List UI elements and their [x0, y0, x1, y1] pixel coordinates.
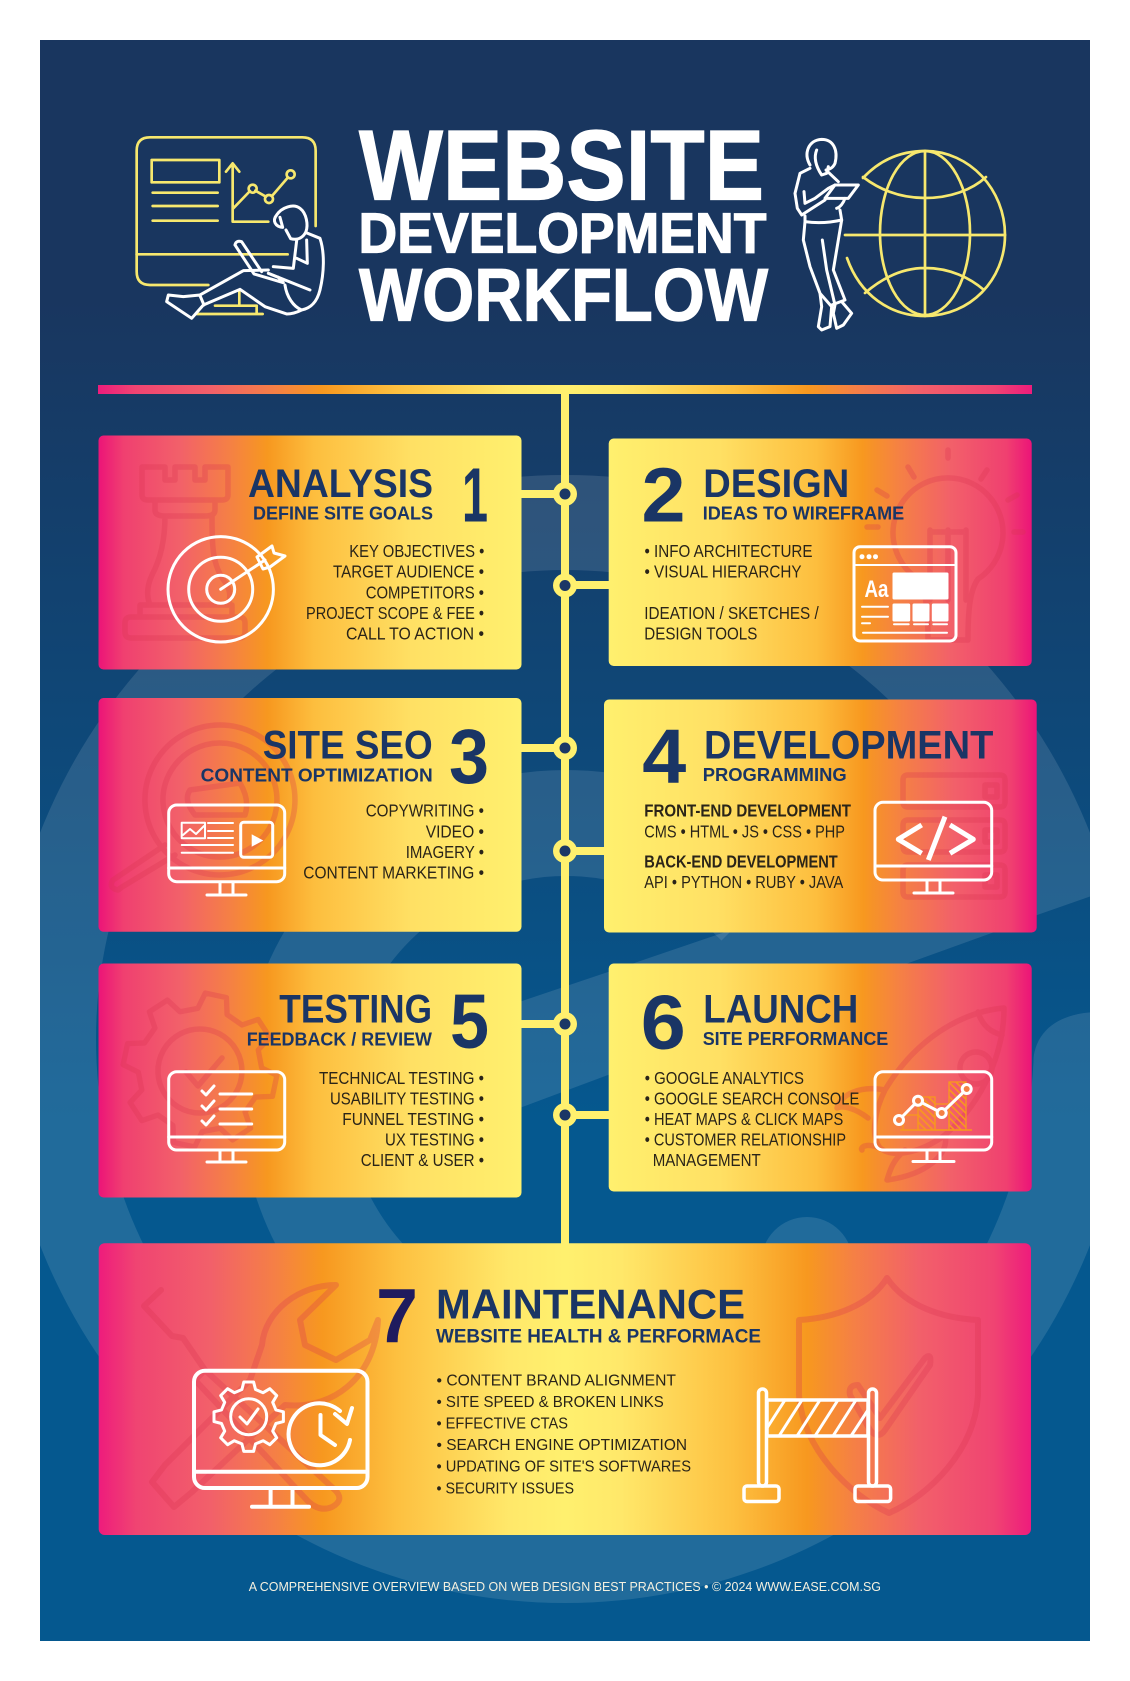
list: CMS • HTML • JS • CSS • PHP — [644, 821, 845, 841]
panel: 3 site seo — [98, 698, 522, 932]
list: • UPDATING OF SITE'S SOFTWARES — [436, 1458, 691, 1475]
step number: 5 — [450, 979, 489, 1065]
icon: ghost light bulb — [867, 450, 1023, 640]
list: • CONTENT BRAND ALIGNMENT — [436, 1372, 676, 1389]
icon: monitor with bar and line chart — [875, 1072, 992, 1162]
icon: ghost chess rook — [125, 467, 245, 638]
panel: 4 development: PROGRAMMING — [703, 764, 847, 785]
list: COPYWRITING • — [366, 801, 484, 821]
icon: target with arrow — [168, 537, 285, 642]
list: TARGET AUDIENCE • — [333, 562, 484, 582]
panel: 5 testing — [98, 964, 522, 1198]
icon: ghost magnifier with megaphone — [111, 725, 295, 890]
list: • SECURITY ISSUES — [436, 1480, 574, 1497]
panel: 7 maintenance — [99, 1243, 1031, 1535]
icon: monitor with code tag — [875, 802, 992, 893]
list: UX TESTING • — [385, 1130, 484, 1150]
list: • INFO ARCHITECTURE — [644, 541, 812, 561]
timeline connector — [521, 394, 609, 1244]
list: IMAGERY • — [406, 842, 484, 862]
icon: ghost rocket — [837, 1008, 1004, 1180]
list: CONTENT MARKETING • — [303, 863, 484, 883]
step number: 7 — [376, 1273, 418, 1359]
list: BACK-END DEVELOPMENT — [644, 851, 838, 871]
list: • HEAT MAPS & CLICK MAPS — [645, 1109, 843, 1129]
title: WEBSITE — [359, 110, 764, 220]
icon: website wireframe window — [854, 547, 956, 641]
list: • GOOGLE ANALYTICS — [645, 1068, 804, 1088]
title: WORKFLOW — [359, 254, 768, 337]
list: MANAGEMENT — [653, 1150, 761, 1170]
list: FRONT-END DEVELOPMENT — [644, 801, 851, 821]
list — [645, 1068, 859, 1170]
icon: ghost crossed screwdriver and wrench — [144, 1285, 378, 1509]
panel: 1 analysis — [98, 436, 522, 670]
list: IDEATION / SKETCHES / — [644, 603, 819, 623]
panel: 2 design — [609, 438, 1032, 666]
list — [644, 541, 819, 643]
step number: 2 — [642, 453, 686, 539]
panel: 1 analysis: DEFINE SITE GOALS — [253, 502, 433, 523]
panel: 6 launch: SITE PERFORMANCE — [703, 1028, 888, 1049]
list: PROJECT SCOPE & FEE • — [306, 603, 484, 623]
list: • EFFECTIVE CTAS — [436, 1415, 568, 1432]
list: • SEARCH ENGINE OPTIMIZATION — [436, 1437, 687, 1454]
list: CLIENT & USER • — [361, 1150, 484, 1170]
heading: LAUNCH — [703, 987, 858, 1031]
panel: 2 design: Aa — [864, 576, 889, 603]
step number: 4 — [642, 714, 686, 800]
icon: ghost server stack — [903, 775, 1005, 897]
icon: globe — [845, 151, 1005, 316]
icon: person at laptop with chart screen — [137, 137, 323, 318]
heading: ANALYSIS — [248, 462, 433, 506]
icon: monitor with checklist — [169, 1072, 285, 1162]
list — [319, 1068, 484, 1170]
footer: A COMPREHENSIVE OVERVIEW BASED ON WEB DESIGN BEST PRACTICES • © 2024 WWW.EASE.COM.SG — [249, 1580, 881, 1594]
list: API • PYTHON • RUBY • JAVA — [644, 872, 844, 892]
list — [644, 801, 851, 892]
list: • GOOGLE SEARCH CONSOLE — [645, 1088, 859, 1108]
list: • SITE SPEED & BROKEN LINKS — [436, 1394, 664, 1411]
icon: standing person with tablet — [795, 139, 858, 330]
top gradient bar — [98, 385, 1032, 394]
list: CALL TO ACTION • — [346, 623, 484, 643]
list: FUNNEL TESTING • — [342, 1109, 484, 1129]
heading: SITE SEO — [263, 723, 433, 767]
background swirl logo — [40, 475, 1090, 1603]
heading: MAINTENANCE — [436, 1280, 745, 1327]
list — [303, 801, 484, 883]
title: DEVELOPMENT — [358, 202, 767, 266]
panel: 6 launch — [609, 964, 1032, 1192]
list — [436, 1372, 691, 1497]
icon: monitor with media — [169, 805, 285, 895]
list: • VISUAL HIERARCHY — [644, 562, 802, 582]
panel: 3 site seo: CONTENT OPTIMIZATION — [201, 765, 433, 786]
icon: ghost shield with check — [799, 1278, 978, 1513]
icon: monitor with gear and clock — [194, 1371, 368, 1507]
panel: 5 testing: FEEDBACK / REVIEW — [247, 1028, 433, 1049]
list — [306, 541, 484, 643]
list: • CUSTOMER RELATIONSHIP — [645, 1130, 846, 1150]
list: KEY OBJECTIVES • — [349, 541, 484, 561]
panel: 4 development — [604, 700, 1037, 932]
step number: 1 — [462, 453, 488, 539]
icon: barrier — [744, 1389, 891, 1502]
heading: TESTING — [279, 988, 432, 1032]
heading: DESIGN — [703, 462, 849, 506]
step number: 6 — [641, 980, 686, 1066]
list: TECHNICAL TESTING • — [319, 1068, 484, 1088]
icon: ghost gear with check — [109, 979, 291, 1161]
title — [358, 110, 768, 337]
heading: DEVELOPMENT — [704, 723, 993, 767]
panel: 7 maintenance: WEBSITE HEALTH & PERFORMACE — [436, 1326, 761, 1348]
list: DESIGN TOOLS — [644, 623, 757, 643]
list: VIDEO • — [426, 821, 484, 841]
list: COMPETITORS • — [366, 582, 484, 602]
step number: 3 — [449, 714, 489, 800]
panel: 2 design: IDEAS TO WIREFRAME — [703, 502, 904, 523]
list: USABILITY TESTING • — [330, 1088, 484, 1108]
